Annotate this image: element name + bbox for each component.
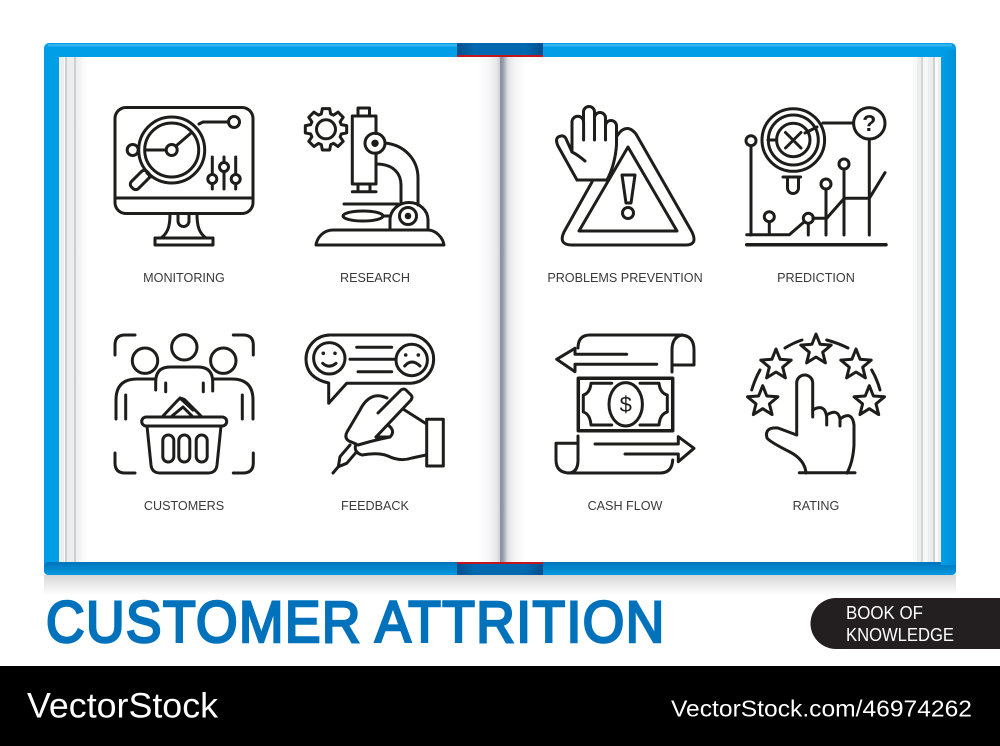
label: research: RESEARCH — [340, 271, 410, 285]
badge: book of knowledge: BOOK OF — [846, 603, 923, 623]
gutter shadow — [478, 57, 526, 562]
panel: feedback — [306, 335, 443, 513]
label: prediction: PREDICTION — [777, 271, 855, 285]
panel: cash flow — [556, 335, 694, 513]
label: problems prevention: PROBLEMS PREVENTION — [547, 271, 703, 285]
panel: problems prevention — [547, 106, 703, 285]
panel: prediction — [746, 108, 886, 285]
icon: dollar sign: $ — [620, 392, 632, 417]
icon: banknote on scroll with arrows — [556, 335, 694, 473]
book shadow — [44, 575, 956, 595]
label: feedback: FEEDBACK — [341, 499, 410, 513]
icon: microscope and gear — [305, 108, 444, 245]
footer url: VectorStock.com/46974262 — [671, 696, 972, 722]
icon: raised hand and warning triangle — [557, 106, 694, 245]
book cover — [44, 43, 956, 575]
footer brand: VectorStock — [27, 686, 218, 726]
label: cash flow: CASH FLOW — [588, 499, 663, 513]
label: monitoring: MONITORING — [143, 271, 225, 285]
badge: book of knowledge — [810, 598, 1000, 649]
icon: hand pointing at stars — [748, 334, 884, 473]
footer bar — [0, 666, 1000, 746]
panel: rating — [748, 334, 884, 513]
icon: magnifier over chart — [746, 108, 886, 245]
panel: research — [305, 108, 444, 285]
icon: face eyes — [322, 352, 420, 357]
badge: book of knowledge: KNOWLEDGE — [846, 625, 954, 645]
icon: question mark: ? — [862, 110, 876, 136]
left page edges — [59, 57, 87, 562]
right page edges — [913, 57, 941, 562]
icon: computer monitor with gauge — [115, 108, 253, 245]
label: rating: RATING — [793, 499, 839, 513]
panel: monitoring — [115, 108, 253, 285]
right page — [500, 57, 941, 562]
bottom spine band — [457, 562, 543, 575]
open book — [44, 43, 956, 575]
icon: speech bubble with faces and writing hand — [306, 335, 443, 473]
label: customers: CUSTOMERS — [144, 499, 224, 513]
title: CUSTOMER ATTRITION — [46, 590, 664, 654]
panel: customers — [115, 335, 253, 513]
top spine band — [457, 43, 543, 57]
left page — [59, 57, 500, 562]
icon: customers and basket — [115, 335, 253, 473]
